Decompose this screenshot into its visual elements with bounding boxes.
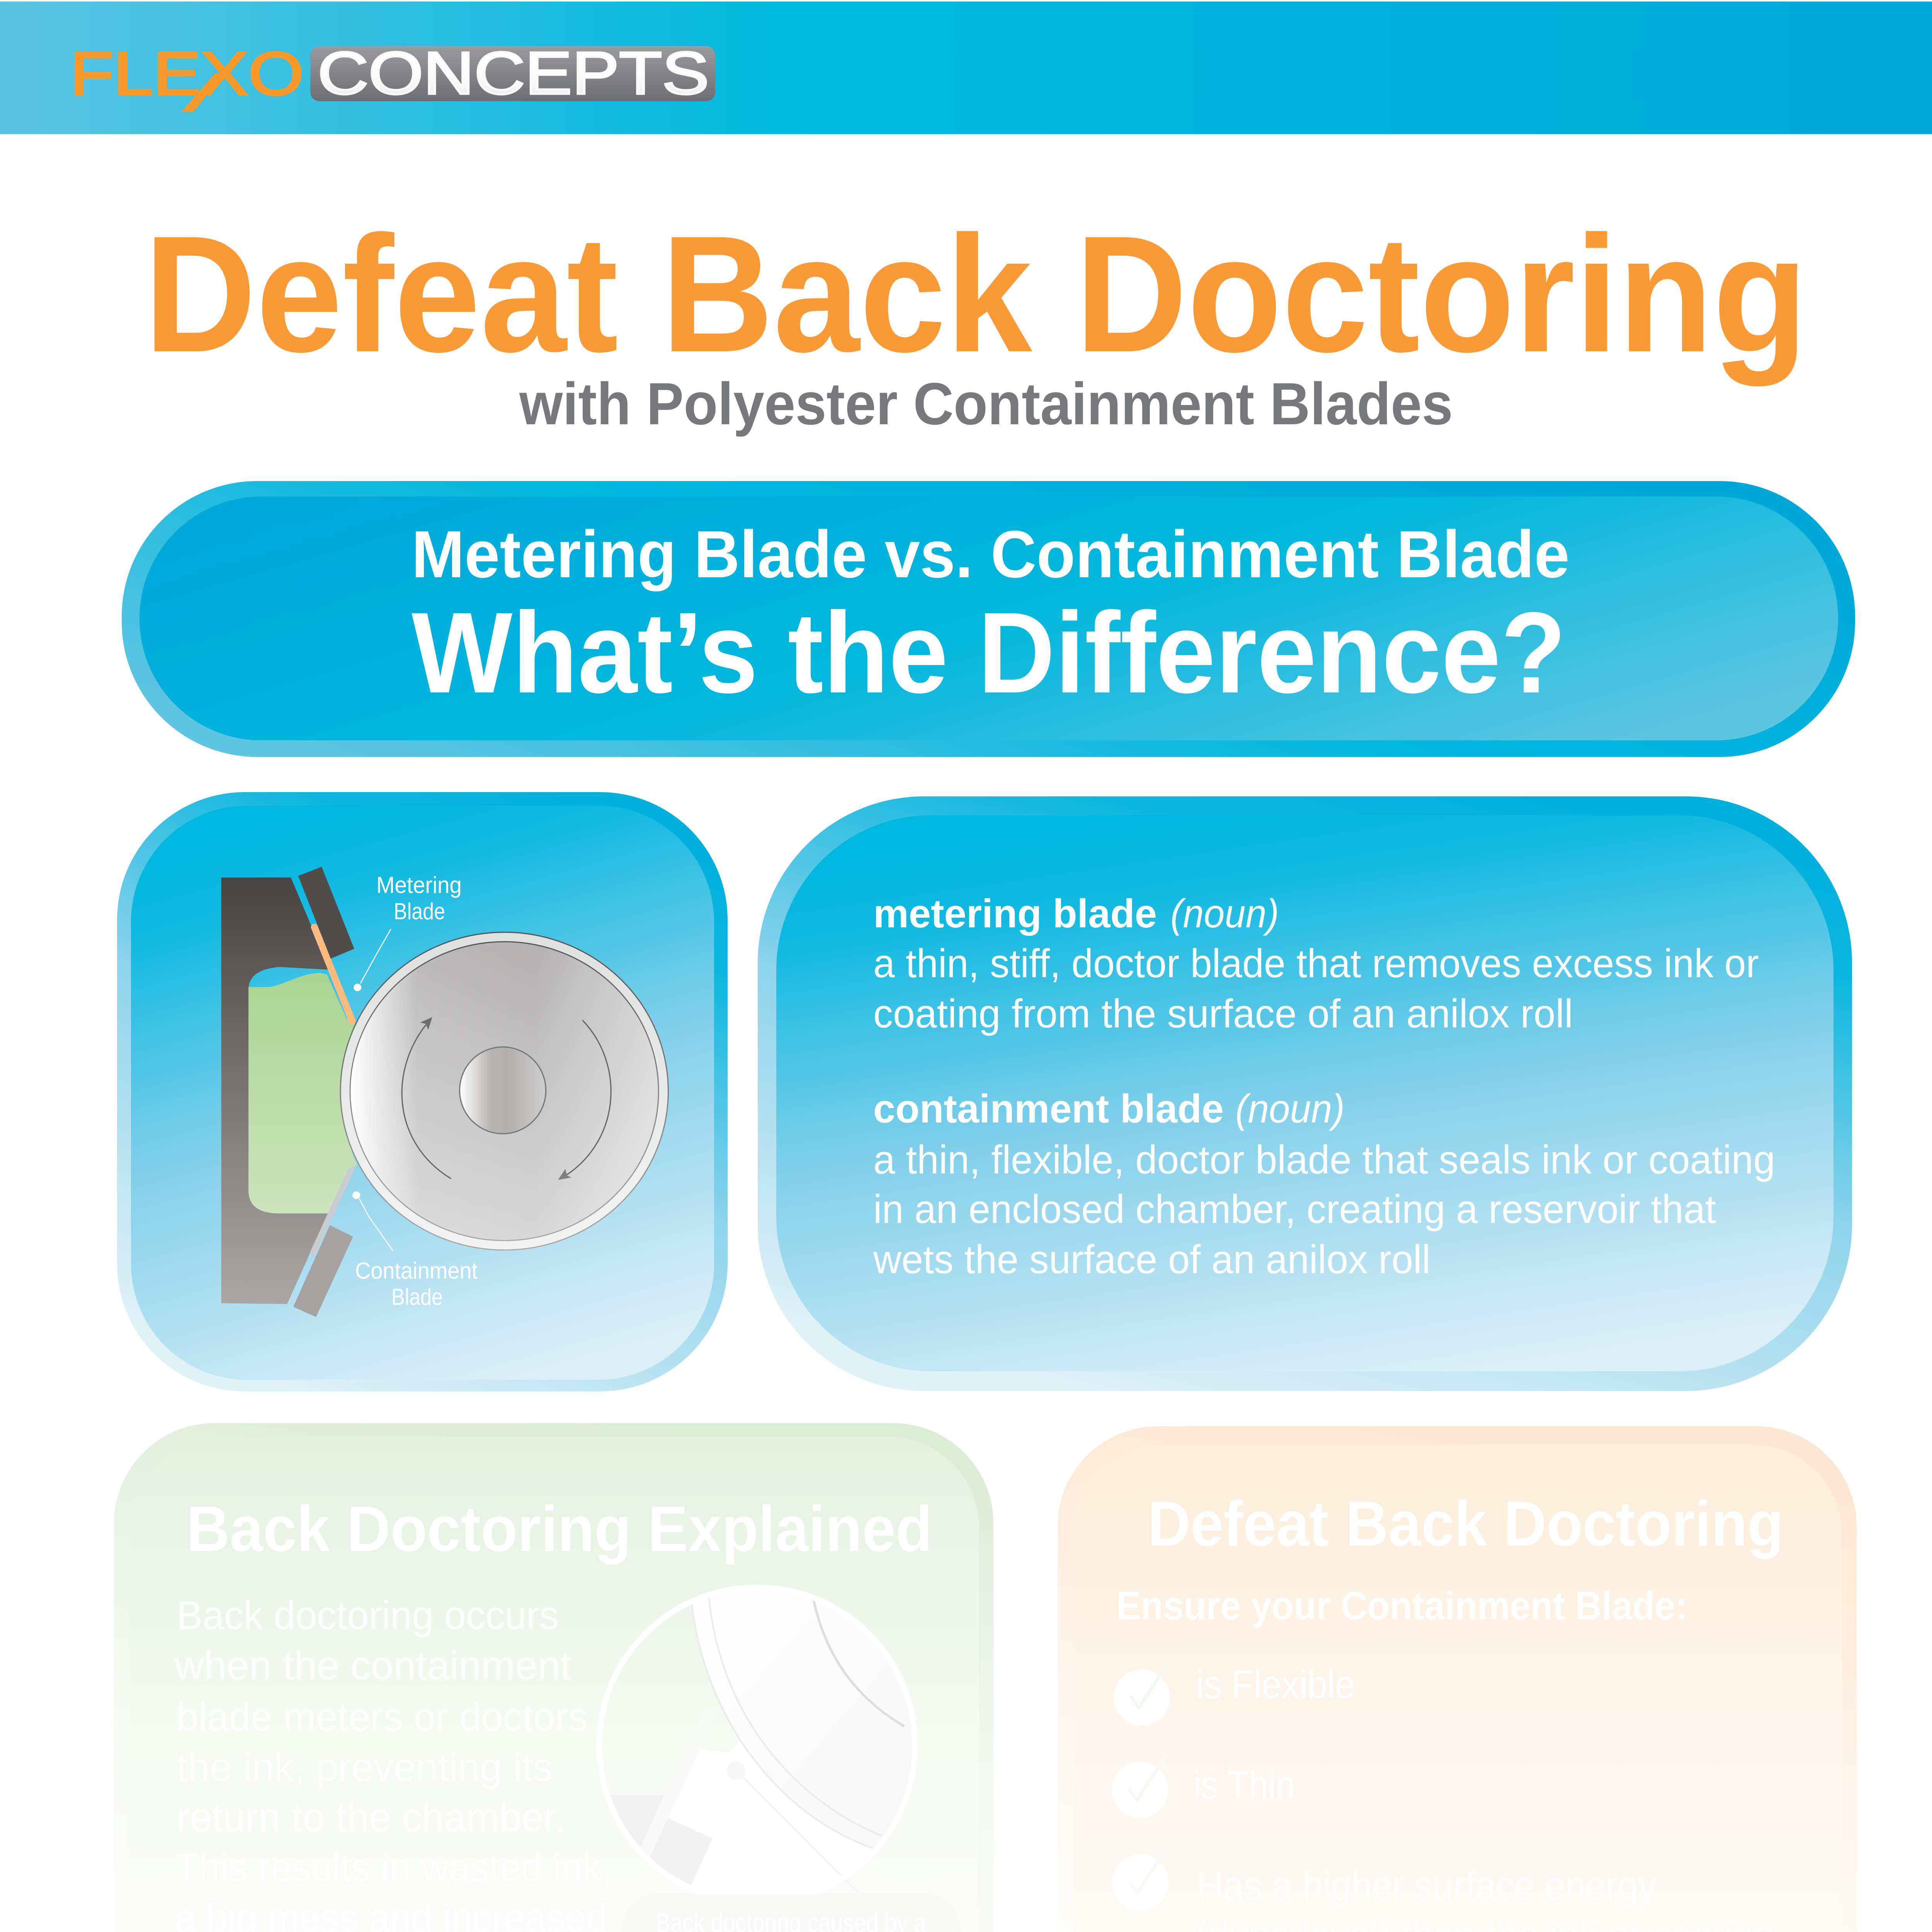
ink	[248, 973, 357, 1213]
definition: metering blade: a thin, stiff, doctor blade that removes excess ink or	[873, 941, 1759, 986]
roll edge lines	[692, 1598, 905, 1848]
checklist item: thin: is Thin	[1193, 1763, 1295, 1808]
definition: metering blade: (noun)	[1170, 891, 1279, 936]
banner subheading: Metering Blade vs. Containment Blade	[412, 517, 1570, 592]
checklist item: surface energy: Has a higher surface energy	[1197, 1864, 1656, 1908]
leader	[727, 1762, 859, 1894]
label: containment blade: Containment	[355, 1258, 478, 1284]
logo word: FLEXO: FLEXO	[70, 40, 304, 108]
roll hub	[459, 1047, 546, 1134]
label: containment blade	[355, 1258, 478, 1310]
checklist item: flexible	[1114, 1662, 1355, 1726]
body text: explanation: return to the chamber.	[177, 1795, 566, 1840]
diagram: doctor chamber and anilox roll	[221, 867, 668, 1317]
containment blade holder	[293, 1225, 353, 1317]
checklist item: thin	[1112, 1756, 1295, 1818]
label: metering blade: Metering	[376, 872, 462, 898]
logo: Flexo Concepts	[70, 40, 715, 112]
label: metering blade	[376, 872, 462, 924]
containment blade	[641, 1701, 723, 1857]
definition: metering blade: coating from the surface of an anilox roll	[873, 992, 1573, 1036]
panel: what's the difference banner	[122, 481, 1855, 757]
anilox roll surface	[692, 1590, 910, 1765]
heading: back doctoring explained: Back Doctoring Explained	[186, 1493, 932, 1565]
subtitle: with Polyester Containment Blades	[519, 371, 1453, 437]
panel: defeat back doctoring checklist	[1058, 1426, 1857, 1932]
heading: defeat back doctoring: Defeat Back Doctoring	[1148, 1488, 1784, 1559]
header band	[0, 2, 1932, 134]
panel: back doctoring explained	[114, 1423, 993, 1932]
metering leader	[354, 929, 391, 991]
subheading: ensure your containment blade: Ensure your Containment Blade:	[1116, 1583, 1687, 1628]
metering blade	[315, 927, 352, 1021]
body text: explanation: when the containment	[174, 1643, 571, 1688]
lens ring	[599, 1587, 915, 1903]
body text: explanation: the ink, preventing its	[177, 1745, 553, 1790]
checklist item: flexible: is Flexible	[1196, 1662, 1355, 1707]
definition: containment blade: containment blade	[873, 1087, 1224, 1131]
body text: explanation: blade meters or doctors	[177, 1695, 588, 1740]
magnified lens: back doctoring detail	[599, 1587, 915, 1903]
label: containment blade: Blade	[391, 1284, 443, 1310]
chamber body	[221, 878, 330, 1304]
definition: metering blade	[873, 891, 1759, 1036]
containment blade	[310, 1164, 357, 1257]
blade holder	[650, 1818, 713, 1885]
definition: containment blade	[873, 1087, 1775, 1282]
banner heading: What’s the Difference?	[412, 588, 1566, 717]
definition: containment blade: (noun)	[1235, 1087, 1345, 1131]
label: metering blade: Blade	[394, 898, 445, 924]
panel: blade diagram	[117, 792, 728, 1391]
anilox roll	[340, 932, 668, 1250]
panel: definitions	[758, 796, 1852, 1391]
metering blade holder	[298, 867, 354, 959]
rotation arrow left	[402, 1017, 451, 1179]
definition: metering blade: metering blade	[873, 891, 1157, 936]
definition: containment blade: a thin, flexible, doctor blade that seals ink or coating	[873, 1138, 1775, 1182]
rotation arrow right	[558, 1020, 611, 1180]
containment leader	[352, 1192, 393, 1251]
white chamber body	[668, 1740, 861, 1845]
definition: containment blade: wets the surface of an anilox roll	[873, 1237, 1430, 1282]
body text: explanation	[174, 1593, 612, 1932]
body text: explanation: Back doctoring occurs	[177, 1593, 559, 1638]
logo badge: CONCEPTS: CONCEPTS	[318, 40, 709, 107]
body text: explanation: This results in wasted ink,	[175, 1845, 612, 1890]
chamber wall	[611, 1795, 664, 1847]
checklist item: surface energy	[1112, 1849, 1775, 1932]
definition: containment blade: in an enclosed chamber, creating a reservoir that	[873, 1187, 1716, 1232]
main title: Defeat Back Doctoring	[144, 201, 1808, 388]
lens caption	[622, 1894, 960, 1932]
